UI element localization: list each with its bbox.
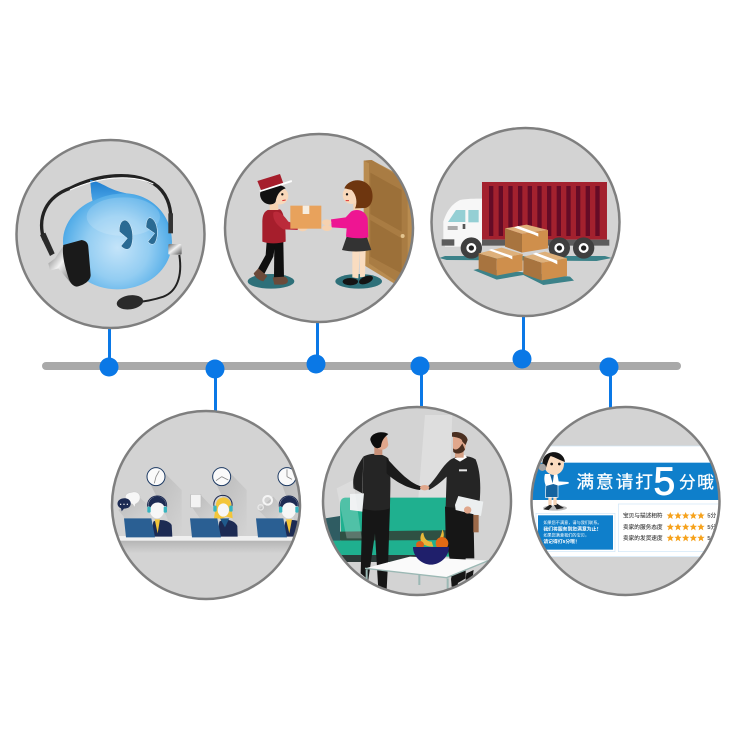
desk [120,540,292,550]
laptops [124,518,287,537]
headline text [576,460,716,503]
ratings box: 卖家的服务态度 [623,523,663,531]
man right [428,432,483,587]
man left [350,432,422,590]
door [364,160,412,283]
table [365,557,488,578]
panel: courier hands parcel to customer [225,134,415,322]
timeline stems and markers [100,317,618,411]
wheels [461,237,594,259]
microphone boom [142,254,182,302]
left message box: 请记得打5分哦！ [543,538,580,545]
left message box: 如果您不满意，请与我们联系。 [543,519,602,525]
cab [443,199,482,247]
panel: call centre agents [112,411,310,599]
left message box: 我们将服务到您满意为止！ [543,526,601,533]
panel: support mascot with headset [16,140,204,328]
wall shadows [118,474,298,522]
right connector [168,244,182,255]
silver ear plate [48,246,72,284]
headline text: 分哦 [679,473,716,492]
sofa [340,498,450,557]
ratings box: 5分 [707,523,716,531]
ratings box: 卖家的发货速度 [623,534,663,542]
sofa highlight [337,480,362,538]
droplet body [63,180,172,289]
fruit bowl [420,533,433,547]
headline text: 5 [654,460,675,503]
ratings box: 宝贝与描述相符 [623,512,663,520]
panel: five star rating banner [530,407,725,595]
chassis [482,240,609,246]
headband [42,176,171,240]
gear icon [263,496,272,505]
ground shadow [439,256,612,261]
timeline bar [42,362,681,370]
ratings box: 5分 [707,512,716,520]
courier [274,242,284,277]
left headset arm [40,233,55,256]
blue headline band [530,463,725,500]
panel: business handshake [323,407,511,595]
left message box [536,513,615,552]
floor shadows [248,274,294,289]
parcel [290,206,321,229]
agent left [147,496,172,537]
container [482,182,607,240]
box shadow [473,268,574,285]
customer [352,250,366,278]
cartoon agent [539,452,569,511]
ratings box: 5分 [707,534,716,542]
tablet icon [191,494,201,508]
boxes [479,225,567,280]
agent middle [213,495,238,537]
headline text: 满意请打 [576,472,655,492]
agent right [278,496,299,537]
ear cup [63,240,91,287]
white banner background [530,446,725,557]
ratings box [618,504,725,552]
chat bubbles [125,492,140,507]
window light [418,415,452,498]
handshake hands [420,485,429,490]
panel: delivery truck and boxes [432,128,620,316]
left message box: 如果您满意我们的宝贝， [543,531,589,537]
clocks [147,468,296,486]
eyes [119,220,133,249]
